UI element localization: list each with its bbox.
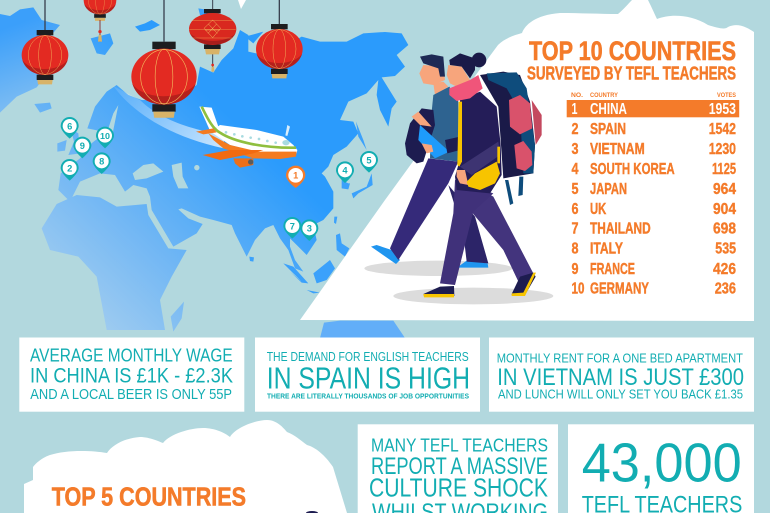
row 3: 1230 [709,141,736,158]
pin 6 [61,117,79,139]
lantern 2 top [84,0,116,42]
pin 10 [96,127,114,148]
row 2: 1542 [709,121,736,138]
row 3: VIETNAM [590,141,645,158]
row 6 [572,201,736,218]
row 5: 964 [713,181,736,198]
lantern 4 knot [189,0,236,72]
pin 4: 4 [342,166,348,176]
row 7: 7 [572,221,578,238]
traveller head [306,511,318,513]
row 9: FRANCE [590,261,635,278]
panel: 43,000 teachers [568,424,754,513]
lantern 3 large [131,0,197,118]
pin 7: 7 [290,221,295,231]
row 5 [572,181,736,198]
row 4 [572,161,736,178]
australia [320,321,405,338]
pin 5 [360,151,378,173]
panel: spain demand: THE DEMAND FOR ENGLISH TEACHERS [267,349,469,364]
highlighted row: china: 1953 [709,101,736,118]
pin 4 [336,161,354,183]
pin 7 [283,217,301,239]
pin 3 [300,219,318,241]
row 8: 535 [715,241,736,258]
pin 3: 3 [307,224,312,234]
pin 9 [73,137,91,158]
pin 2: 2 [67,163,72,173]
pin 10: 10 [100,131,110,141]
panel: vietnam rent [489,338,754,412]
pin 1 china: 1 [293,171,298,181]
man [371,54,488,268]
panel: spain demand: THERE ARE LITERALLY THOUSANDS OF JOB OPPORTUNITIES [267,392,469,401]
lanterns [22,0,378,241]
woman [423,53,542,297]
panel: spain demand: IN SPAIN IS HIGH [267,360,470,395]
panel: top 5 countries cloud [24,420,347,513]
row 5: JAPAN [590,181,627,198]
row 7: THAILAND [590,221,651,238]
row 10: GERMANY [590,281,649,298]
row 9: 9 [572,261,579,278]
column headers: NO. [571,92,583,99]
world map [0,7,408,338]
panel: spain demand [255,338,480,412]
pin 1 china [286,166,305,188]
pin 2 [61,159,79,181]
lantern 1 [22,0,68,84]
heading: TOP 5 COUNTRIES [52,484,246,512]
row 4: 4 [572,161,579,178]
row 5: 5 [572,181,579,198]
map pins [61,117,378,241]
pin 6: 6 [67,121,72,131]
column headers [571,92,737,99]
row 2 [572,121,736,138]
row 9: 426 [713,261,736,278]
highlighted row: china: CHINA [590,101,627,118]
panel: culture shock [358,424,558,513]
row 7 [572,221,736,238]
panel: culture shock: REPORT A MASSIVE [371,453,548,480]
pin 5: 5 [366,155,372,165]
aeroplane [196,107,297,168]
row 4: 1125 [712,161,736,178]
row 7: 698 [713,221,736,238]
panel: 43,000 teachers: 43,000 [582,432,742,494]
highlighted row: china [567,100,739,118]
row 6: UK [590,201,607,218]
lantern 5 [256,0,303,78]
row 8: ITALY [590,241,624,258]
row 10: 236 [715,281,736,298]
plane trail [113,86,224,148]
row 4: SOUTH KOREA [590,161,675,178]
pin 8 [93,152,111,174]
illustration: two travellers [364,53,553,304]
islands [34,20,263,332]
africa [42,195,187,330]
eurasia [58,30,408,272]
panel: culture shock: CULTURE SHOCK [369,475,548,503]
panel: top 10 white cloud [238,0,754,321]
panel: china wage: AVERAGE MONTHLY WAGE [30,345,233,366]
row 10 [572,281,736,298]
row 6: 6 [572,201,579,218]
row 8 [572,241,736,258]
row 2: 2 [572,121,578,138]
panel: china wage: AND A LOCAL BEER IS ONLY 55P [30,387,232,403]
row 3: 3 [572,141,579,158]
highlighted row: china: 1 [572,101,578,118]
inland seas [108,105,200,188]
pin 8: 8 [99,157,104,167]
pin 9: 9 [80,141,85,151]
row 2: SPAIN [590,121,626,138]
panel: culture shock: MANY TEFL TEACHERS [371,435,548,456]
row 10: 10 [572,281,584,298]
row 9 [572,261,736,278]
row 8: 8 [572,241,579,258]
table: top 10 countries [527,36,739,298]
panel: china wage [19,338,244,412]
panel: china wage: IN CHINA IS £1K - £2.3K [30,364,233,387]
column headers: COUNTRY [590,92,619,99]
column headers: VOTES [717,92,737,99]
row 6: 904 [713,201,736,218]
row 3 [572,141,736,158]
north america [0,7,60,112]
